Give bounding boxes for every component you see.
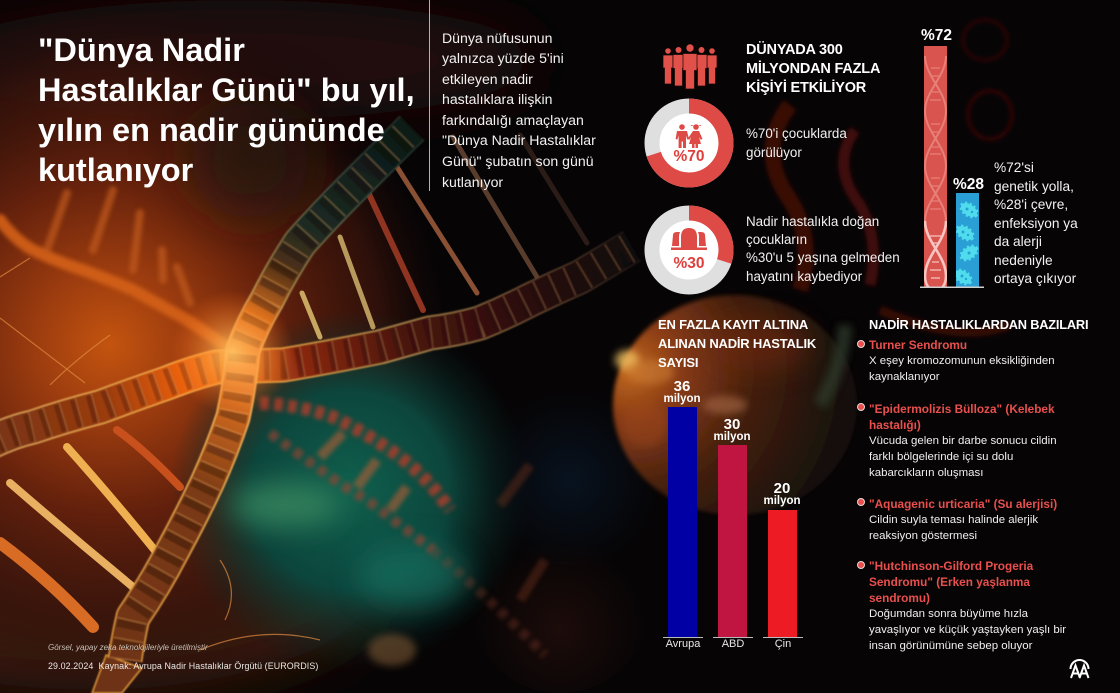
baseline: Çin	[763, 637, 803, 638]
list item: Epidermolizis	[869, 402, 1057, 478]
donut: 30 percent: %30	[673, 255, 705, 272]
text: 70 percent	[746, 126, 847, 160]
list item: Epidermolizis: Vücuda gelen bir darbe sonucu cildin	[869, 434, 1057, 446]
image note: Görsel, yapay zeka teknolojileriyle üretilmiştir	[48, 643, 208, 652]
intro text: farkındalığı amaçlayan	[442, 112, 584, 128]
intro text: Günü" şubatın son günü	[442, 153, 594, 169]
bullet	[857, 561, 865, 569]
icon: people group	[662, 44, 718, 90]
logo: AA	[1070, 659, 1090, 678]
heading: 300 million	[746, 41, 880, 96]
intro text: yalnızca yüzde 5'ini	[442, 50, 564, 66]
red flames and cells behind the top right	[772, 20, 1012, 332]
thin filaments	[0, 258, 320, 650]
list item: Progeria: Sendromu" (Erken yaşlanma	[869, 575, 1030, 589]
heading: chart: ALINAN NADİR HASTALIK	[658, 336, 816, 351]
text: genetic causes	[994, 160, 1078, 286]
bar: 72 percent genetic	[920, 46, 952, 288]
heading: chart: SAYISI	[658, 355, 698, 370]
text: genetic causes: da alerji	[994, 234, 1042, 249]
list item: Epidermolizis: kabarcıkların oluşması	[869, 466, 983, 478]
list item: Progeria: insan görünümüne sebep oluyor	[869, 640, 1032, 652]
list item: Progeria	[869, 559, 1066, 652]
label: ABD: ABD	[722, 638, 744, 650]
title	[38, 32, 415, 188]
bar: 28 percent environmental	[952, 193, 984, 288]
title: "Dünya Nadir	[38, 32, 245, 68]
label: 72 percent: %72	[921, 27, 952, 44]
list item: Aquagenic: reaksiyon göstermesi	[869, 530, 977, 542]
text: genetic causes: genetik yolla,	[994, 178, 1074, 194]
heading: 300 million: DÜNYADA 300	[746, 42, 843, 58]
bar: Avrupa	[668, 407, 697, 637]
value: 36: milyon	[663, 393, 701, 405]
list item: Progeria: Doğumdan sonra büyüme hızla	[869, 608, 1028, 620]
list item: Aquagenic: "Aquagenic urticaria" (Su alerjisi)	[869, 496, 1057, 510]
text: 30 percent: %30'u 5 yaşına gelmeden	[746, 250, 900, 265]
bar chart	[663, 378, 803, 650]
title: kutlanıyor	[38, 152, 193, 188]
text: genetic causes: nedeniyle	[994, 252, 1053, 268]
title: Hastalıklar Günü" bu yıl,	[38, 72, 415, 108]
text: 70 percent: %70'i çocuklarda	[746, 126, 847, 140]
blurred background helix, upper left	[0, 190, 227, 347]
icon: gravestones	[671, 228, 707, 250]
list item: Aquagenic: Cildin suyla teması halinde alerjik	[869, 514, 1038, 526]
helix rungs	[0, 135, 587, 627]
list item: Epidermolizis: "Epidermolizis Bülloza" (Kelebek	[869, 402, 1055, 416]
baseline: ABD	[713, 637, 753, 638]
value: 36	[663, 378, 701, 405]
list item: Aquagenic	[869, 496, 1057, 542]
donut: 70 percent	[644, 98, 734, 188]
value: 30	[713, 416, 751, 443]
text: genetic causes: %72'si	[994, 160, 1034, 175]
label: 28 percent: %28	[953, 176, 984, 193]
intro text: kutlanıyor	[442, 174, 503, 190]
donut: 30 percent	[644, 206, 734, 294]
donut: 70 percent: %70	[673, 148, 705, 165]
value: 20	[763, 480, 801, 507]
value: 20: 20	[774, 480, 790, 497]
intro text	[442, 30, 596, 190]
heading: list: NADİR HASTALIKLARDAN BAZILARI	[869, 317, 1088, 332]
source line: 29.02.2024 Kaynak: Avrupa Nadir Hastalıklar Örgütü (EURORDIS)	[48, 661, 318, 671]
heading: 300 million: MİLYONDAN FAZLA	[746, 61, 880, 77]
helix strand A	[0, 246, 632, 445]
text: genetic causes: ortaya çıkıyor	[994, 271, 1076, 286]
title: yılın en nadir gününde	[38, 112, 385, 148]
list item: Turner	[869, 338, 1055, 382]
list item: Turner: kaynaklanıyor	[869, 370, 940, 382]
label: Çin: Çin	[775, 638, 791, 650]
intro text: "Dünya Nadir Hastalıklar	[442, 132, 596, 148]
list item: Turner: X eşey kromozomunun eksikliğinden	[869, 354, 1055, 366]
icon: children	[676, 124, 702, 148]
heading: 300 million: KİŞİYİ ETKİLİYOR	[746, 80, 866, 96]
intro text: hastalıklara ilişkin	[442, 91, 552, 107]
intro text: etkileyen nadir	[442, 71, 533, 87]
text: genetic causes: %28'i çevre,	[994, 197, 1068, 212]
list item: Epidermolizis: farklı bölgelerinde içi su dolu	[869, 450, 1013, 462]
baseline: Avrupa	[663, 637, 703, 638]
value: 36: 36	[674, 378, 690, 395]
text: 70 percent: görülüyor	[746, 144, 802, 160]
bullet	[857, 498, 865, 506]
text: genetic causes: enfeksiyon ya	[994, 216, 1078, 230]
bar: Çin	[768, 510, 797, 637]
bullet	[857, 340, 865, 348]
divider line	[429, 0, 430, 191]
heading: chart	[658, 317, 816, 370]
value: 20: milyon	[763, 495, 801, 507]
list item: Progeria: "Hutchinson-Gilford Progeria	[869, 559, 1033, 573]
heading: chart: EN FAZLA KAYIT ALTINA	[658, 317, 808, 332]
list item: Progeria: yavaşlıyor ve küçük yaştayken yaşlı bir	[869, 624, 1066, 636]
text: 30 percent: çocukların	[746, 232, 807, 247]
label: Avrupa: Avrupa	[666, 638, 700, 650]
list item: Epidermolizis: hastalığı)	[869, 418, 921, 432]
intro text: Dünya nüfusunun	[442, 30, 552, 46]
bullet	[857, 403, 865, 411]
list item: Turner: Turner Sendromu	[869, 338, 967, 352]
text: 30 percent	[746, 214, 900, 284]
bar: ABD	[718, 445, 747, 637]
list item: Progeria: sendromu)	[869, 591, 930, 605]
cell sphere	[613, 295, 857, 515]
blurred background helix, lower right	[260, 403, 545, 655]
value: 30: milyon	[713, 431, 751, 443]
text: 30 percent: Nadir hastalıkla doğan	[746, 214, 879, 228]
helix strand B	[92, 128, 412, 693]
text: 30 percent: hayatını kaybediyor	[746, 269, 862, 284]
value: 30: 30	[724, 416, 740, 433]
